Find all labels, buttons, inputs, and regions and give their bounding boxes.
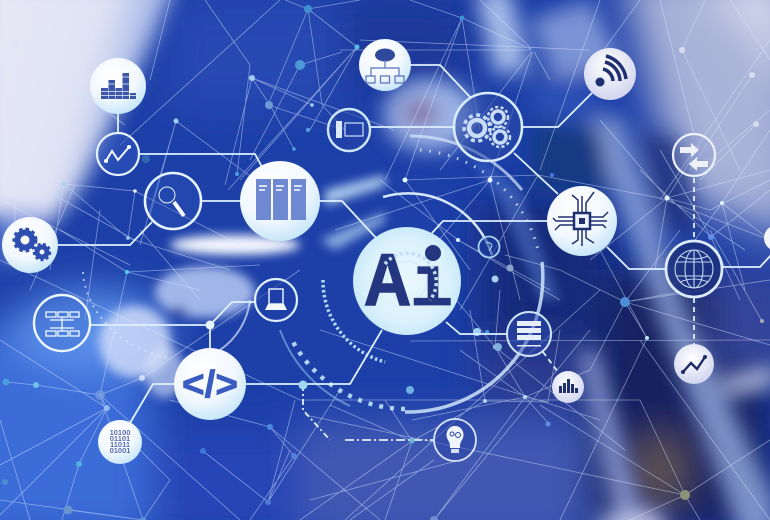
icon: wifi node <box>584 48 636 100</box>
icon: code node: </> <box>182 364 238 406</box>
icon: code node <box>174 348 246 420</box>
AI hub node: i <box>410 245 453 327</box>
icon: server ring <box>507 312 551 356</box>
icon: gears node left <box>2 217 58 273</box>
icon: chip node <box>547 186 617 256</box>
icon: globe ring <box>666 241 722 297</box>
icon: line chart ring <box>97 133 139 175</box>
junction dots <box>206 320 414 442</box>
icon: gears ring <box>454 93 522 161</box>
icon: small ring near hub <box>478 236 500 258</box>
connector lines between nodes <box>58 65 770 440</box>
icon: cloud hierarchy node <box>359 39 411 91</box>
AI hub node: A <box>364 240 411 321</box>
icon: binary node: 10100 <box>110 428 130 437</box>
icon: binary node: 01101 <box>110 434 130 443</box>
icon: server racks node <box>240 161 320 241</box>
icon: binary node: 01001 <box>110 446 130 455</box>
icon: binary node <box>98 420 142 464</box>
icon: monitor ring <box>328 109 370 151</box>
icon: arrows ring <box>673 134 715 176</box>
icon: partial node at right edge <box>764 225 770 251</box>
icon: network diagram ring <box>34 295 90 351</box>
icon: binary node: 11011 <box>110 440 130 449</box>
icon: light bulb ring <box>434 419 476 461</box>
icon: magnifier ring <box>145 173 201 229</box>
icon: trend chart node <box>674 344 714 384</box>
icon: bar chart node <box>90 58 146 114</box>
AI hub node <box>353 227 461 335</box>
icon: laptop ring <box>255 279 297 321</box>
arcs around AI hub <box>83 136 543 412</box>
icon: small bars node <box>552 371 584 403</box>
